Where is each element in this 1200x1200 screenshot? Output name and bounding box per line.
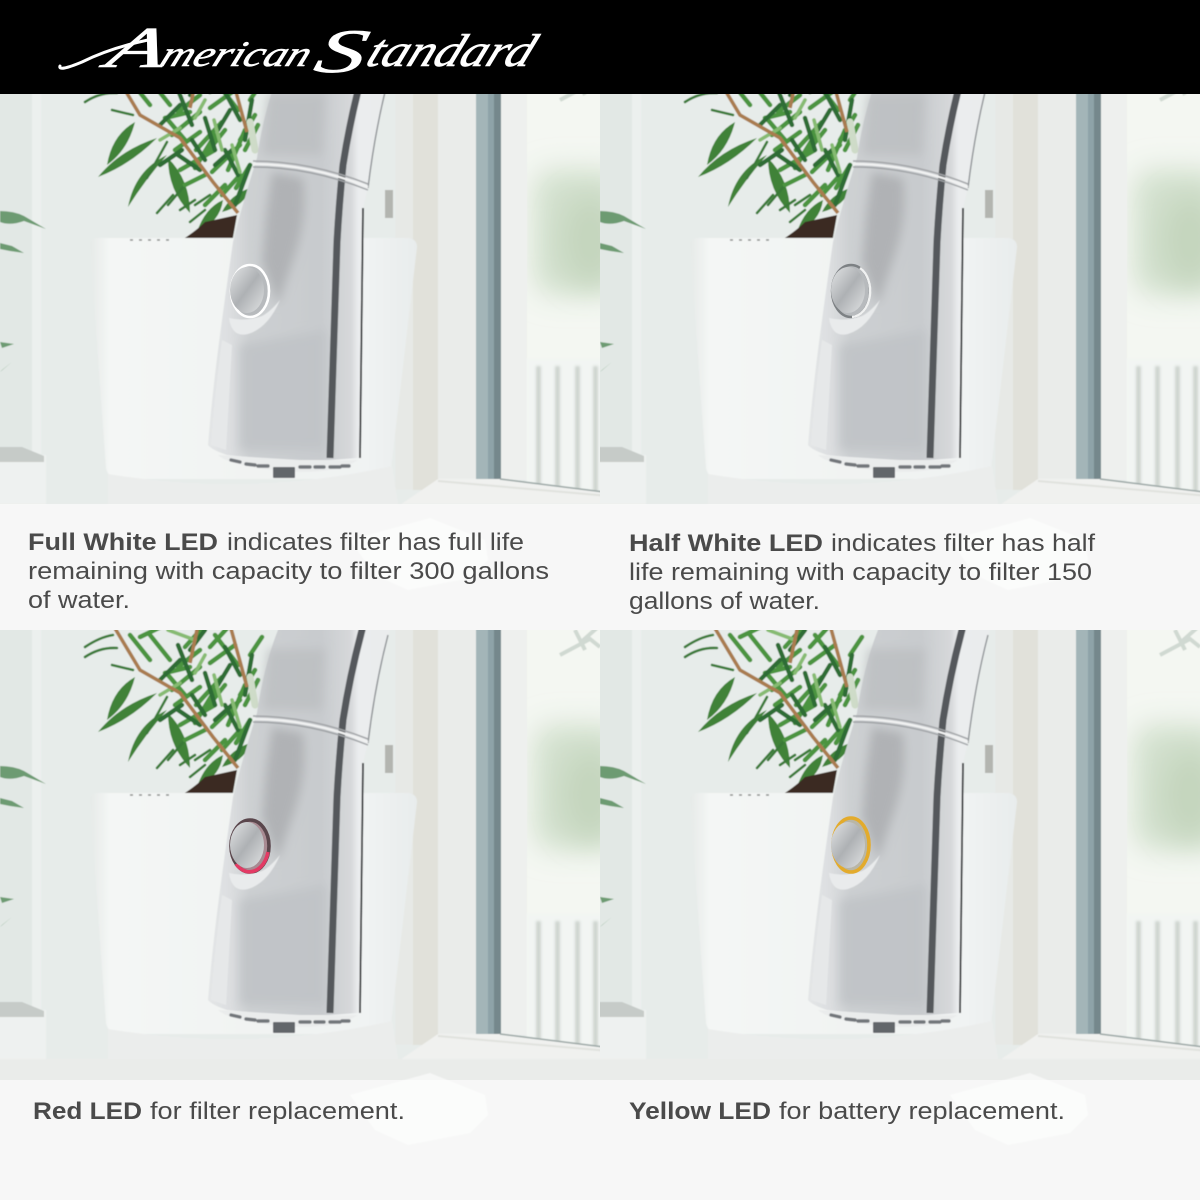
caption text — [34, 1102, 403, 1124]
caption text: remaining with capacity to filter 300 gallons — [28, 558, 549, 585]
caption text: Full White LED — [28, 529, 218, 556]
LED: half white ring — [831, 265, 870, 317]
caption text: for filter replacement. — [150, 1098, 405, 1125]
caption text — [630, 1102, 1063, 1124]
caption text — [629, 530, 1095, 615]
LED: full white ring — [230, 265, 269, 317]
panel: red LED — [0, 605, 624, 1200]
logo: American Standard: S — [309, 17, 376, 86]
caption text: indicates filter has half — [831, 530, 1095, 557]
logo: American Standard: A — [94, 15, 178, 80]
caption text: for battery replacement. — [779, 1098, 1065, 1125]
caption panel — [600, 1080, 1200, 1200]
logo: American Standard: merican — [155, 35, 318, 75]
LED: yellow ring — [831, 818, 869, 872]
logo: American Standard — [60, 15, 545, 86]
caption text — [29, 532, 548, 608]
caption panel — [0, 504, 600, 630]
panel: full white LED — [0, 94, 600, 630]
caption text: gallons of water. — [629, 588, 820, 615]
logo: American Standard: tandard — [360, 26, 545, 77]
caption panel — [600, 504, 1200, 630]
LED: red ring — [230, 820, 269, 872]
caption text: Yellow LED — [629, 1098, 771, 1125]
caption text: life remaining with capacity to filter 150 — [629, 559, 1092, 586]
caption text: of water. — [28, 587, 130, 614]
panel: yellow LED — [580, 605, 1200, 1200]
caption text: indicates filter has full life — [227, 529, 524, 556]
top black band — [0, 0, 1200, 94]
caption panel — [0, 1080, 600, 1200]
caption text: Half White LED — [629, 530, 823, 557]
panel: half white LED — [600, 94, 1200, 630]
caption text: Red LED — [33, 1098, 142, 1125]
